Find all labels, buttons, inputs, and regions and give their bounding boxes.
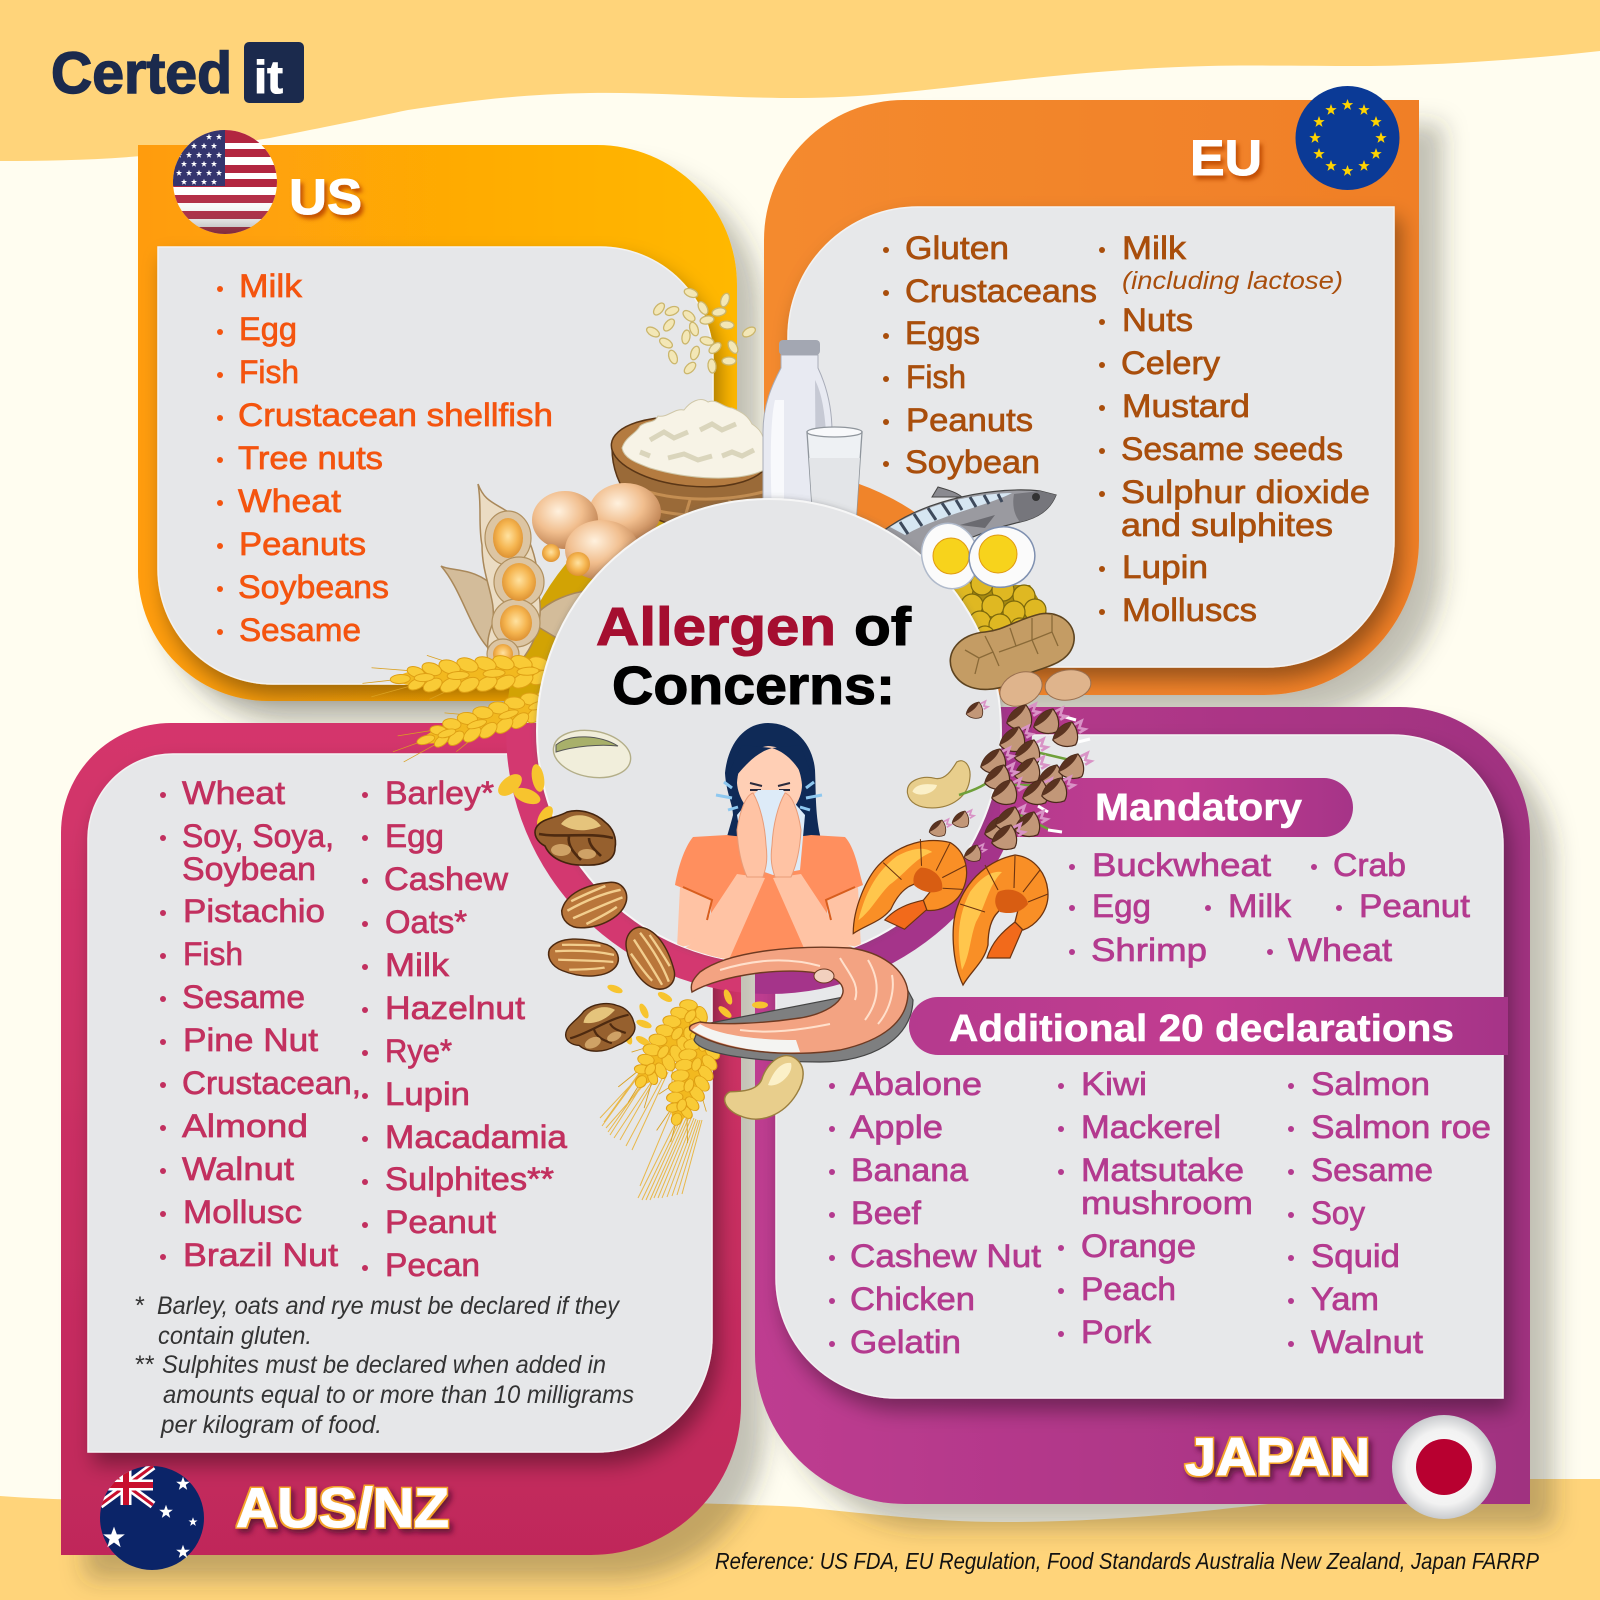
list: EU allergens column 2: (including lactose) — [1122, 267, 1343, 295]
icon: cashews — [720, 761, 970, 1134]
list: Japan mandatory: Wheat — [1288, 932, 1392, 968]
footnotes: contain gluten. — [158, 1322, 312, 1350]
list: AUS/NZ allergens column 1: Wheat — [182, 775, 285, 811]
footnotes: per kilogram of food. — [160, 1411, 382, 1439]
list: Japan additional column 3 — [1288, 1066, 1491, 1360]
list: AUS/NZ allergens column 2: Peanut — [385, 1204, 496, 1240]
list: Japan additional column 3: Yam — [1311, 1281, 1379, 1317]
top wave band — [0, 0, 1600, 161]
list: EU allergens column 2: Celery — [1121, 345, 1220, 381]
heading: AUS/NZ: AUS/NZ — [236, 1476, 449, 1539]
list: US allergens: Tree nuts — [238, 440, 383, 476]
icon: wheat ears lower — [600, 989, 733, 1200]
list: Japan additional column 2 — [1058, 1066, 1253, 1350]
list: EU allergens column 1 — [883, 230, 1097, 480]
list: Japan additional column 2: Mackerel — [1081, 1109, 1221, 1145]
list: Japan additional column 3: Salmon — [1311, 1066, 1430, 1102]
list: Japan additional column 3: Squid — [1311, 1238, 1400, 1274]
icon: mackerel fish — [882, 487, 1056, 560]
list: Japan additional column 3: Walnut — [1311, 1324, 1423, 1360]
panel: AUS/NZ — [61, 723, 778, 1593]
icon: almonds — [544, 882, 677, 994]
list: AUS/NZ allergens column 2: Milk — [385, 947, 450, 983]
list: AUS/NZ allergens column 2: Sulphites** — [385, 1161, 554, 1197]
list: EU allergens column 1: Gluten — [905, 230, 1009, 266]
footnotes: Barley, oats and rye must be declared if they — [157, 1292, 620, 1320]
icon: glass of milk — [807, 427, 862, 520]
icon: wheat ears upper — [361, 648, 566, 769]
list: Japan additional column 3: Sesame — [1311, 1152, 1433, 1188]
list: Japan additional column 2: Orange — [1081, 1228, 1196, 1264]
list: EU allergens column 2: Milk — [1122, 230, 1187, 266]
list: AUS/NZ allergens column 1: Sesame — [182, 979, 305, 1015]
bottom wave band — [0, 1479, 1600, 1600]
list: EU allergens column 2: and sulphites — [1121, 507, 1333, 543]
list: AUS/NZ allergens column 2: Hazelnut — [385, 990, 525, 1026]
icon: buckwheat — [929, 701, 1091, 861]
list: EU allergens column 1: Peanuts — [906, 402, 1033, 438]
icon: pistachio — [550, 725, 634, 783]
list: Japan additional column 1 — [829, 1066, 1041, 1360]
list: EU allergens column 1: Eggs — [905, 315, 980, 351]
logo: Certed it: it — [254, 51, 283, 103]
list: Japan mandatory: Buckwheat — [1092, 847, 1271, 883]
list: AUS/NZ allergens column 1: Pistachio — [183, 893, 325, 929]
list: US allergens: Sesame — [239, 612, 361, 648]
list: Japan additional column 2: mushroom — [1081, 1185, 1253, 1221]
heading: US: US — [289, 169, 362, 225]
list: US allergens: Crustacean shellfish — [238, 397, 553, 433]
icon: walnuts — [535, 811, 640, 1064]
list: EU allergens column 1: Crustaceans — [905, 273, 1097, 309]
icon: eggs — [532, 483, 661, 580]
list: Japan mandatory — [1069, 847, 1470, 968]
list: Japan additional column 3: Salmon roe — [1311, 1109, 1491, 1145]
list: AUS/NZ allergens column 1: Mollusc — [183, 1194, 302, 1230]
banner: Mandatory — [1000, 778, 1353, 837]
flag: United States — [173, 130, 277, 235]
list: Japan additional column 3: Soy — [1311, 1195, 1365, 1231]
banner: Additional 20 declarations: Additional 20 declarations — [949, 1008, 1454, 1050]
footnotes: Sulphites must be declared when added in — [162, 1351, 606, 1379]
list: Japan additional column 1: Beef — [851, 1195, 921, 1231]
list: EU allergens column 2: Nuts — [1122, 302, 1193, 338]
flag: European Union — [1296, 86, 1400, 190]
icon: milk bottle — [763, 340, 832, 515]
flag: Australia — [100, 1466, 204, 1570]
list: AUS/NZ allergens column 2: Pecan — [385, 1247, 480, 1283]
list: AUS/NZ allergens column 2: Oats* — [385, 904, 467, 940]
list: US allergens: Milk — [239, 268, 303, 304]
list: Japan additional column 1: Gelatin — [850, 1324, 961, 1360]
panel: US — [138, 130, 764, 723]
list: EU allergens column 2: Sesame seeds — [1121, 431, 1343, 467]
list: EU allergens column 2: Sulphur dioxide — [1121, 474, 1370, 510]
title — [596, 597, 912, 716]
list: AUS/NZ allergens column 2: Barley* — [385, 775, 494, 811]
list: Japan mandatory: Shrimp — [1091, 932, 1207, 968]
list: EU allergens column 2: Lupin — [1122, 549, 1208, 585]
illustration: sneezing woman — [675, 723, 863, 964]
list: AUS/NZ allergens column 2 — [362, 775, 567, 1283]
list: Japan mandatory: Egg — [1092, 888, 1151, 924]
list: Japan additional column 1: Cashew Nut — [850, 1238, 1041, 1274]
list: Japan additional column 2: Kiwi — [1081, 1066, 1147, 1102]
list: AUS/NZ allergens column 1: Almond — [182, 1108, 308, 1144]
banner: Mandatory: Mandatory — [1095, 787, 1302, 829]
icon: yellow grains — [494, 763, 768, 1048]
list: Japan additional column 1: Apple — [850, 1109, 943, 1145]
list: Japan mandatory: Peanut — [1359, 888, 1470, 924]
icon: bowl of flour — [608, 400, 780, 526]
list: AUS/NZ allergens column 1 — [160, 775, 361, 1273]
list: AUS/NZ allergens column 1: Soy, Soya, — [182, 818, 334, 854]
list: Japan mandatory: Crab — [1333, 847, 1406, 883]
list: US allergens: Fish — [239, 354, 299, 390]
list: US allergens: Egg — [239, 311, 297, 347]
list: US allergens: Peanuts — [239, 526, 366, 562]
list: AUS/NZ allergens column 1: Brazil Nut — [183, 1237, 338, 1273]
footnotes: ** — [134, 1351, 155, 1379]
list: EU allergens column 1: Soybean — [905, 444, 1040, 480]
panel: EU — [764, 86, 1457, 707]
heading: Japan: JAPAN — [1185, 1428, 1370, 1487]
list: AUS/NZ allergens column 1: Crustacean, — [182, 1065, 361, 1101]
list: Japan additional column 2: Peach — [1081, 1271, 1176, 1307]
list: EU allergens column 1: Fish — [906, 359, 966, 395]
footnotes — [134, 1292, 634, 1439]
logo: Certed it: Certed — [51, 41, 232, 106]
footnotes: amounts equal to or more than 10 milligrams — [163, 1381, 634, 1409]
list: EU allergens column 2: Mustard — [1122, 388, 1250, 424]
list: US allergens: Soybeans — [238, 569, 389, 605]
list: AUS/NZ allergens column 2: Cashew — [384, 861, 509, 897]
icon: shrimps — [845, 818, 1048, 985]
list: AUS/NZ allergens column 1: Fish — [183, 936, 243, 972]
list: US allergens: Wheat — [238, 483, 341, 519]
title: Allergen — [596, 597, 836, 657]
heading: EU: EU — [1190, 130, 1262, 186]
title: of — [854, 597, 912, 657]
footnotes: * — [134, 1292, 145, 1320]
list: AUS/NZ allergens column 2: Egg — [385, 818, 444, 854]
panel: Japan — [755, 707, 1568, 1542]
list: US allergens — [217, 268, 553, 648]
icon: salmon steak — [689, 947, 913, 1062]
list: EU allergens column 2: Molluscs — [1122, 592, 1257, 628]
icon: soybean pods — [441, 484, 600, 672]
title: Concerns: — [612, 656, 895, 716]
icon: peanut — [950, 613, 1093, 713]
center circle — [537, 499, 1001, 963]
list: Japan additional column 1: Abalone — [850, 1066, 982, 1102]
list: Japan additional column 1: Chicken — [850, 1281, 975, 1317]
list: AUS/NZ allergens column 2: Macadamia — [385, 1119, 567, 1155]
list: Japan additional column 2: Matsutake — [1081, 1152, 1244, 1188]
list: EU allergens column 2 — [1099, 230, 1370, 628]
list: AUS/NZ allergens column 1: Pine Nut — [183, 1022, 318, 1058]
list: AUS/NZ allergens column 2: Rye* — [385, 1033, 452, 1069]
list: AUS/NZ allergens column 2: Lupin — [385, 1076, 470, 1112]
list: Japan additional column 1: Banana — [851, 1152, 968, 1188]
banner: Additional 20 declarations — [909, 997, 1508, 1055]
list: AUS/NZ allergens column 1: Soybean — [182, 851, 316, 887]
list: AUS/NZ allergens column 1: Walnut — [182, 1151, 294, 1187]
icon: yellow soybeans — [945, 573, 1048, 650]
icon: rice grains — [645, 287, 757, 376]
list: Japan mandatory: Milk — [1228, 888, 1292, 924]
icon: boiled eggs — [914, 517, 1042, 595]
list: Japan additional column 2: Pork — [1081, 1314, 1152, 1350]
flag: Japan — [1392, 1415, 1496, 1519]
